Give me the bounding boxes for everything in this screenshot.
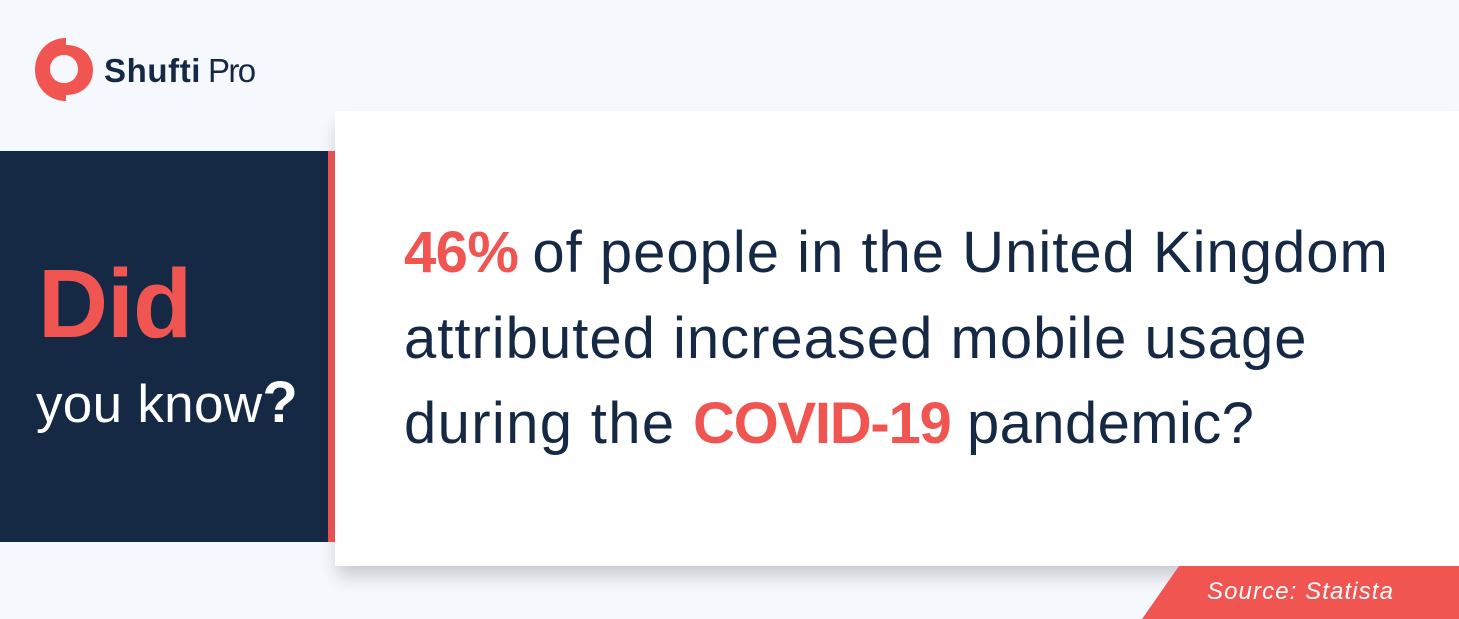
logo: Shufti Pro: Pro bbox=[208, 52, 255, 89]
statement text bbox=[404, 220, 1389, 456]
accent stripe bbox=[328, 151, 335, 542]
heading: you know?: you know? bbox=[36, 370, 298, 435]
logo: Shufti Pro bbox=[35, 38, 255, 101]
statement text: 46% of people in the United Kingdom bbox=[404, 220, 1389, 285]
icon: logo ring bbox=[35, 38, 93, 101]
source tag bbox=[1142, 566, 1459, 619]
panel: statistic card bbox=[335, 111, 1459, 566]
panel: did you know bbox=[0, 151, 335, 542]
logo wordmark bbox=[104, 52, 255, 89]
statement text: during the COVID-19 pandemic? bbox=[404, 391, 1254, 456]
source text: Source: Statista bbox=[1207, 578, 1394, 605]
tag shape bbox=[1142, 566, 1459, 619]
logo wordmark: Shufti bbox=[104, 52, 201, 89]
heading: Did: Did bbox=[38, 249, 191, 358]
statement text: attributed increased mobile usage bbox=[404, 306, 1308, 370]
